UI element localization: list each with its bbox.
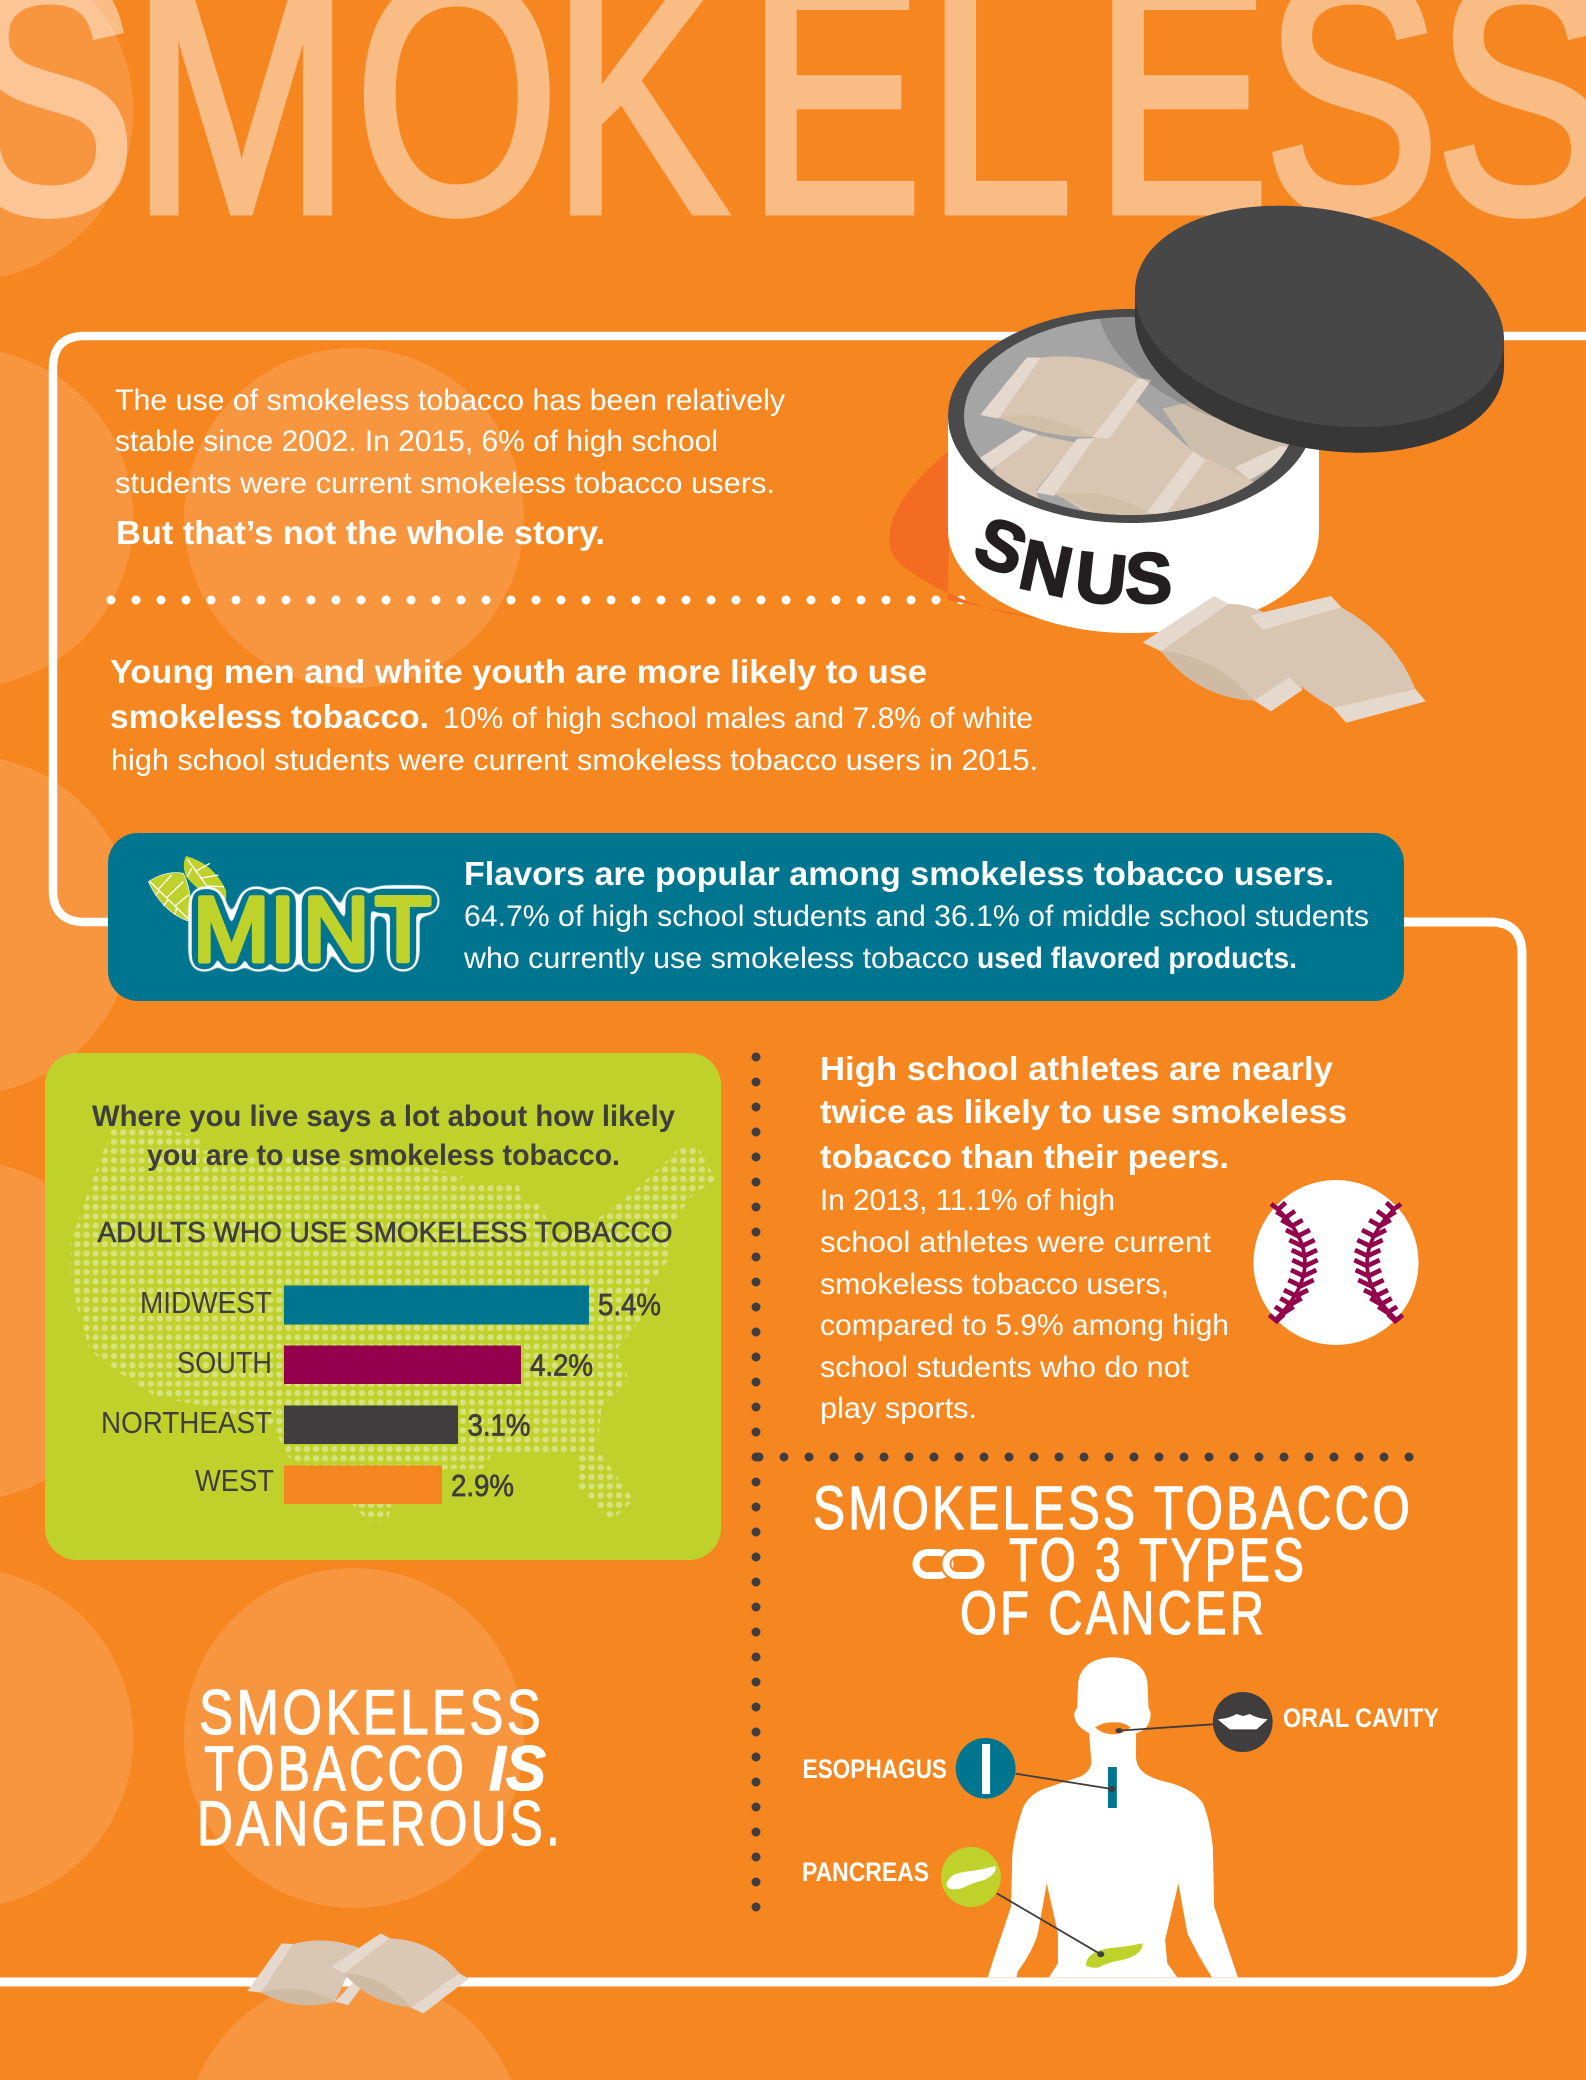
dotted divider — [111, 596, 962, 604]
bar chart: WEST — [195, 1463, 274, 1498]
bar chart: 4.2% — [530, 1348, 593, 1382]
pancreas organ — [1086, 1943, 1143, 1968]
can interior with pouches — [964, 317, 1289, 515]
young men text: Young men and white youth are more likely to use — [110, 653, 927, 690]
athletes text: compared to 5.9% among high — [820, 1309, 1229, 1342]
can body — [948, 416, 1319, 633]
cancer heading: OF CANCER — [960, 1579, 1267, 1647]
white frame line upper — [53, 336, 1586, 922]
icon: baseball — [1254, 1180, 1418, 1345]
icon: mint leaves — [148, 856, 226, 922]
flavors text: who currently use smokeless tobacco — [463, 942, 969, 975]
athletes text: school athletes were current — [820, 1226, 1212, 1259]
lid — [1115, 176, 1524, 483]
dangerous statement: DANGEROUS. — [197, 1789, 563, 1859]
vertical dotted divider — [752, 1057, 760, 1910]
label: oral cavity: ORAL CAVITY — [1283, 1703, 1439, 1733]
young men text: smokeless tobacco. — [110, 698, 429, 735]
dangerous statement: IS — [489, 1734, 546, 1804]
can rim — [948, 309, 1314, 523]
bar chart: 5.4% — [598, 1287, 661, 1322]
athletes text — [820, 1050, 1347, 1425]
icon: pancreas — [941, 1847, 1001, 1907]
young men text: 10% of high school males and 7.8% of white — [443, 702, 1033, 735]
flavors text: used flavored products. — [977, 942, 1297, 975]
athletes text: play sports. — [820, 1392, 977, 1425]
panel: flavors — [108, 833, 1404, 1001]
body silhouette — [941, 1657, 1273, 1977]
cancer heading: TO 3 TYPES — [1009, 1526, 1307, 1594]
flavors text — [463, 855, 1369, 975]
athletes text: smokeless tobacco users, — [820, 1268, 1169, 1301]
esophagus organ — [1108, 1767, 1117, 1808]
illustration: bottom pouches — [247, 1933, 469, 2013]
map of the United States — [70, 1129, 716, 1521]
bar chart: SOUTH — [177, 1345, 272, 1380]
loose pouches — [1143, 596, 1426, 723]
athletes text: High school athletes are nearly — [820, 1050, 1334, 1087]
illustration: snus can — [889, 176, 1524, 723]
panel background — [108, 833, 1404, 1001]
intro text — [115, 384, 785, 551]
heading: Where you live says a lot about how likely — [92, 1100, 675, 1133]
bar chart: MIDWEST — [140, 1285, 272, 1320]
young men text — [110, 653, 1038, 777]
connector lines — [997, 1724, 1213, 1954]
bar chart — [101, 1285, 661, 1504]
athletes text: twice as likely to use smokeless — [820, 1093, 1347, 1130]
bar chart: NORTHEAST — [101, 1405, 272, 1440]
can label: SNUS — [964, 502, 1172, 621]
heading: you are to use smokeless tobacco. — [147, 1139, 620, 1172]
athletes text: In 2013, 11.1% of high — [820, 1184, 1115, 1217]
icon: lips — [1213, 1692, 1273, 1752]
intro text: students were current smokeless tobacco users. — [115, 467, 775, 500]
intro text: stable since 2002. In 2015, 6% of high school — [115, 425, 718, 458]
background circles — [0, 0, 524, 2080]
dangerous statement — [197, 1678, 563, 1859]
bar chart: 2.9% — [451, 1468, 514, 1503]
body diagram — [802, 1657, 1439, 1977]
athletes text: school students who do not — [820, 1351, 1190, 1384]
intro text: But that’s not the whole story. — [116, 514, 605, 551]
mint label: MINT — [193, 879, 431, 981]
icon: chain link — [916, 1552, 981, 1576]
dangerous statement: TOBACCO — [204, 1734, 467, 1804]
white frame line lower — [0, 922, 1522, 1982]
panel: where you live — [45, 1053, 721, 1560]
panel background — [45, 1053, 721, 1560]
lid shadow — [1100, 317, 1218, 419]
cancer heading — [813, 1474, 1413, 1647]
mouth — [1095, 1722, 1131, 1734]
label: esophagus: ESOPHAGUS — [802, 1754, 947, 1784]
athletes text: tobacco than their peers. — [820, 1138, 1229, 1175]
dangerous statement: SMOKELESS — [199, 1678, 544, 1748]
intro text: The use of smokeless tobacco has been relatively — [115, 384, 785, 417]
bar chart: 3.1% — [468, 1408, 530, 1442]
flavors text: Flavors are popular among smokeless tobacco users. — [464, 855, 1334, 892]
chart title: ADULTS WHO USE SMOKELESS TOBACCO — [98, 1217, 672, 1249]
heading — [92, 1100, 675, 1172]
flavors text: 64.7% of high school students and 36.1% of middle school students — [464, 900, 1369, 933]
icon: esophagus — [956, 1738, 1016, 1799]
can shadow — [889, 450, 1050, 620]
young men text: high school students were current smokeless tobacco users in 2015. — [111, 744, 1038, 777]
horizontal dotted divider — [759, 1452, 1420, 1462]
label: pancreas: PANCREAS — [802, 1857, 929, 1887]
cancer heading: SMOKELESS TOBACCO — [813, 1474, 1413, 1542]
